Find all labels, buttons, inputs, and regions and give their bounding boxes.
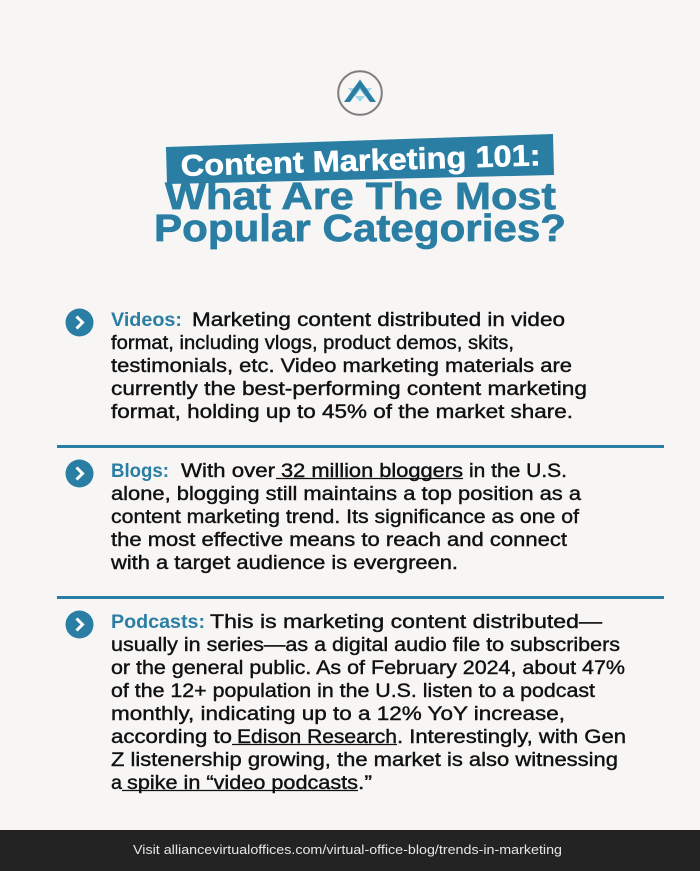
- heading: what are the most: What Are The Most: [165, 176, 556, 218]
- text: podcasts description: [111, 612, 626, 794]
- text: podcasts description: according to: [111, 727, 232, 748]
- text: videos description: format, including vlogs, product demos, skits,: [111, 333, 514, 354]
- text: podcasts description: .”: [358, 773, 372, 794]
- text: blogs description: With over: [181, 461, 276, 482]
- text: podcasts description: spike in “video podcasts: [127, 773, 358, 794]
- text: blogs description: alone, blogging still maintains a top position as a: [111, 484, 581, 505]
- banner: [166, 134, 554, 184]
- text: videos description: currently the best-performing content marketing: [111, 379, 587, 400]
- text: podcasts description: of the 12+ population in the U.S. listen to a podcast: [111, 681, 596, 702]
- text: blogs description: Blogs:: [111, 461, 169, 482]
- text: videos description: Marketing content distributed in video: [192, 310, 565, 331]
- text: podcasts description: . Interestingly, with Gen: [397, 727, 626, 748]
- panel: podcasts: [66, 610, 626, 794]
- footer bar: [0, 830, 700, 871]
- text: videos description: testimonials, etc. Video marketing materials are: [111, 356, 572, 377]
- footer link text: Visit alliancevirtualoffices.com/virtual-office-blog/trends-in-marketing: [133, 842, 562, 857]
- text: podcasts description: Podcasts:: [111, 612, 205, 633]
- text: blogs description: [110, 461, 581, 574]
- text: podcasts description: monthly, indicating up to a 12% YoY increase,: [111, 704, 565, 725]
- text: videos description: format, holding up to 45% of the market share.: [111, 402, 573, 423]
- text: videos description: Videos:: [111, 310, 182, 331]
- heading: popular categories: Popular Categories?: [154, 208, 566, 250]
- icon: blogs chevron: [66, 460, 94, 488]
- text: videos description: [111, 310, 587, 423]
- title: [154, 134, 566, 250]
- text: podcasts description: usually in series—as a digital audio file to subscribers: [111, 635, 620, 656]
- icon: logo: [338, 71, 382, 115]
- text: podcasts description: a: [111, 773, 122, 794]
- icon: videos chevron: [66, 308, 94, 336]
- text: blogs description: 32 million bloggers: [281, 461, 463, 482]
- text: podcasts description: or the general public. As of February 2024, about 47%: [111, 658, 625, 679]
- text: podcasts description: Edison Research: [237, 727, 397, 748]
- text: podcasts description: Z listenership growing, the market is also witnessing: [111, 750, 618, 771]
- panel: blogs: [66, 460, 581, 574]
- icon: podcasts chevron: [66, 610, 94, 638]
- panel: videos: [66, 308, 587, 423]
- text: blogs description: content marketing trend. Its significance as one of: [111, 507, 580, 528]
- footer: [0, 830, 700, 871]
- text: blogs description: in the U.S.: [469, 461, 567, 482]
- heading: content marketing 101: Content Marketing 101:: [180, 139, 541, 183]
- text: podcasts description: This is marketing content distributed—: [210, 612, 602, 633]
- text: blogs description: with a target audience is evergreen.: [110, 553, 458, 574]
- text: blogs description: the most effective means to reach and connect: [111, 530, 568, 551]
